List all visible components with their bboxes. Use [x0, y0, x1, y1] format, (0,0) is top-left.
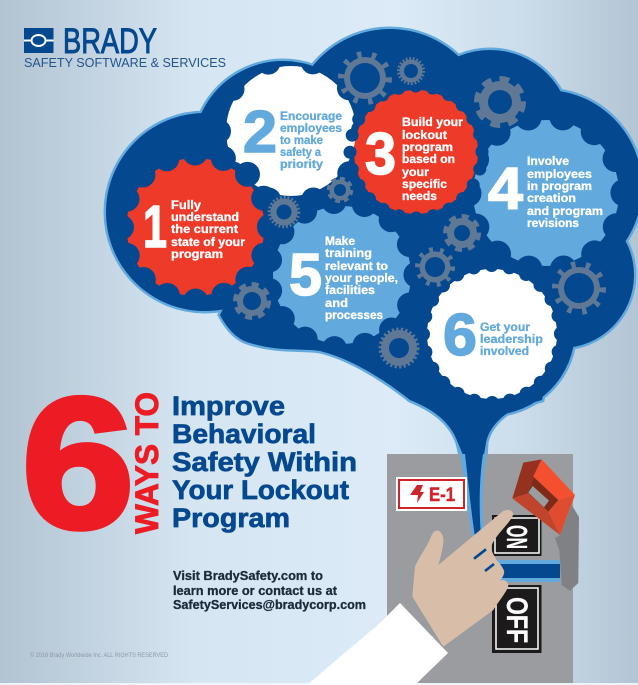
- gear scallops: [473, 120, 619, 266]
- logo: Brady: [24, 22, 226, 70]
- small gear: [398, 58, 424, 84]
- gear 6: get your leadership involved: [427, 269, 557, 399]
- logo tagline: SAFETY SOFTWARE & SERVICES: [24, 56, 226, 70]
- step text: training: [325, 248, 372, 260]
- cloud fill: [106, 29, 638, 460]
- step text: to make: [280, 135, 323, 147]
- step text: specific: [402, 179, 448, 191]
- title: Improve: [172, 391, 285, 421]
- brain cloud with stem: [106, 29, 638, 460]
- cloud outline: [106, 29, 638, 460]
- gear 5: make training relevant: [268, 201, 416, 349]
- title: Your Lockout: [172, 475, 349, 505]
- gear body: [354, 90, 478, 214]
- gear body: [427, 269, 557, 399]
- gear body: [273, 206, 411, 344]
- number 2: 2: [243, 99, 277, 165]
- gear body: [473, 120, 619, 266]
- gear 4: involve employees: [474, 120, 618, 266]
- title: Program: [172, 503, 290, 533]
- step text: your people,: [325, 273, 398, 285]
- step text: leadership: [480, 334, 543, 346]
- step text: your: [402, 167, 430, 179]
- step text: lockout: [402, 130, 447, 142]
- sleeve cuff: [307, 603, 448, 685]
- gears group: [122, 59, 624, 403]
- step text: [171, 200, 246, 261]
- OFF plate: [492, 585, 542, 653]
- small gear: [270, 198, 298, 226]
- gear 3: build your lockout program: [350, 86, 482, 218]
- step text: relevant to: [325, 261, 388, 273]
- hand: [412, 510, 513, 647]
- number 6: 6: [443, 302, 477, 368]
- step text: understand: [171, 212, 239, 224]
- step text: program: [402, 142, 453, 154]
- step text: employees: [280, 123, 342, 135]
- logo mark: [24, 28, 54, 53]
- step text: program: [171, 249, 223, 261]
- step text: state of your: [171, 237, 246, 249]
- step text: safety a: [280, 147, 322, 159]
- contact text: learn more or contact us at: [173, 584, 338, 598]
- WAYS TO vertical text: WAYS TO: [129, 392, 165, 534]
- contact text: [173, 569, 366, 612]
- copyright: © 2016 Brady Worldwide Inc. ALL RIGHTS RESERVED: [30, 651, 168, 659]
- big red numeral 6: 6: [22, 361, 134, 567]
- step text: processes: [325, 310, 383, 322]
- sign label: E-1: [429, 485, 455, 506]
- title: [172, 391, 357, 533]
- small gear: [418, 250, 452, 284]
- title: Safety Within: [172, 447, 357, 477]
- number 5: 5: [289, 242, 322, 308]
- step text: creation: [527, 193, 576, 205]
- small gear: [328, 178, 352, 202]
- step text: based on: [402, 154, 455, 166]
- number 4: 4: [488, 156, 523, 222]
- ON plate: [492, 515, 542, 556]
- step text: employees: [527, 169, 592, 181]
- step text: Fully: [171, 200, 202, 212]
- gear body: [126, 158, 264, 296]
- gear 1: fully understand: [122, 153, 270, 301]
- step text: in program: [527, 181, 592, 193]
- small gear: [236, 284, 268, 318]
- step text: Build your: [402, 117, 464, 129]
- step text: facilities: [325, 285, 375, 297]
- step text: and program: [527, 206, 603, 218]
- contact text: Visit BradySafety.com to: [173, 569, 323, 583]
- ON label: ON: [500, 525, 532, 549]
- small gear: [380, 329, 418, 367]
- step text: Involve: [527, 156, 569, 168]
- step text: priority: [280, 159, 324, 171]
- step text: Encourage: [280, 111, 342, 123]
- icon: lightning: [410, 485, 424, 503]
- red lockout block: [512, 459, 575, 535]
- step text: Get your: [480, 322, 531, 334]
- small gear: [477, 79, 523, 125]
- gear scallops: [219, 59, 363, 203]
- sign: E-1: [396, 477, 467, 511]
- number 3: 3: [365, 121, 396, 187]
- stem over panel: [460, 454, 487, 537]
- step text: [325, 236, 398, 322]
- step text: [480, 322, 543, 358]
- step text: needs: [402, 191, 437, 203]
- OFF label: OFF: [500, 597, 533, 643]
- step text: [527, 156, 603, 230]
- small gear: [556, 265, 602, 311]
- small gear: [342, 55, 388, 101]
- logo wordmark: BRADY: [63, 22, 157, 61]
- step text: [402, 117, 464, 203]
- panel: lockout switch box: [387, 454, 579, 683]
- bottom edge strip: [0, 683, 638, 685]
- gear scallops: [122, 153, 270, 301]
- gear scallops: [427, 269, 557, 399]
- step text: [280, 111, 342, 171]
- gear 2: encourage employees: [219, 59, 363, 203]
- step text: Make: [325, 236, 355, 248]
- step text: revisions: [527, 218, 579, 230]
- contact text: SafetyServices@bradycorp.com: [173, 598, 366, 612]
- switch handle: [555, 505, 579, 591]
- panel body: [387, 454, 573, 683]
- gear scallops: [350, 86, 482, 218]
- small gear: [446, 216, 478, 250]
- number 1: 1: [143, 194, 167, 260]
- gear scallops: [268, 201, 416, 349]
- step text: and: [325, 298, 348, 310]
- horizontal circuit bar: [495, 560, 560, 582]
- step text: involved: [480, 346, 529, 358]
- title: Behavioral: [172, 419, 316, 449]
- gear body: [226, 66, 356, 196]
- step text: the current: [171, 224, 238, 236]
- icon: small gears: [236, 55, 602, 367]
